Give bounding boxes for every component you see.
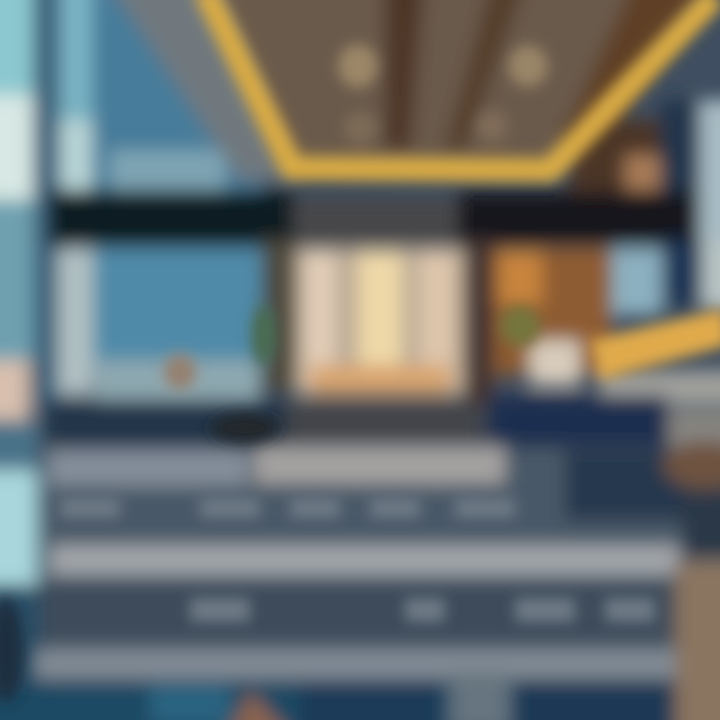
left window strip <box>0 0 60 720</box>
right warm panels <box>464 240 720 405</box>
grey ceiling edge <box>100 0 295 180</box>
floor tile highlights <box>60 498 655 622</box>
dark beam <box>48 190 698 245</box>
plants and objects <box>0 305 540 702</box>
lower blue windows <box>58 240 296 400</box>
bottom foreground <box>0 672 690 720</box>
lower right brown column <box>663 441 720 720</box>
ceiling panel <box>205 0 720 165</box>
gold ceiling trim <box>205 0 715 170</box>
ceiling lights <box>338 44 548 144</box>
upper windows <box>60 0 262 195</box>
sofa band <box>45 396 720 450</box>
floor base <box>35 446 685 685</box>
orange bench <box>590 308 720 380</box>
upper right wall <box>570 100 720 300</box>
central panel <box>296 248 466 395</box>
